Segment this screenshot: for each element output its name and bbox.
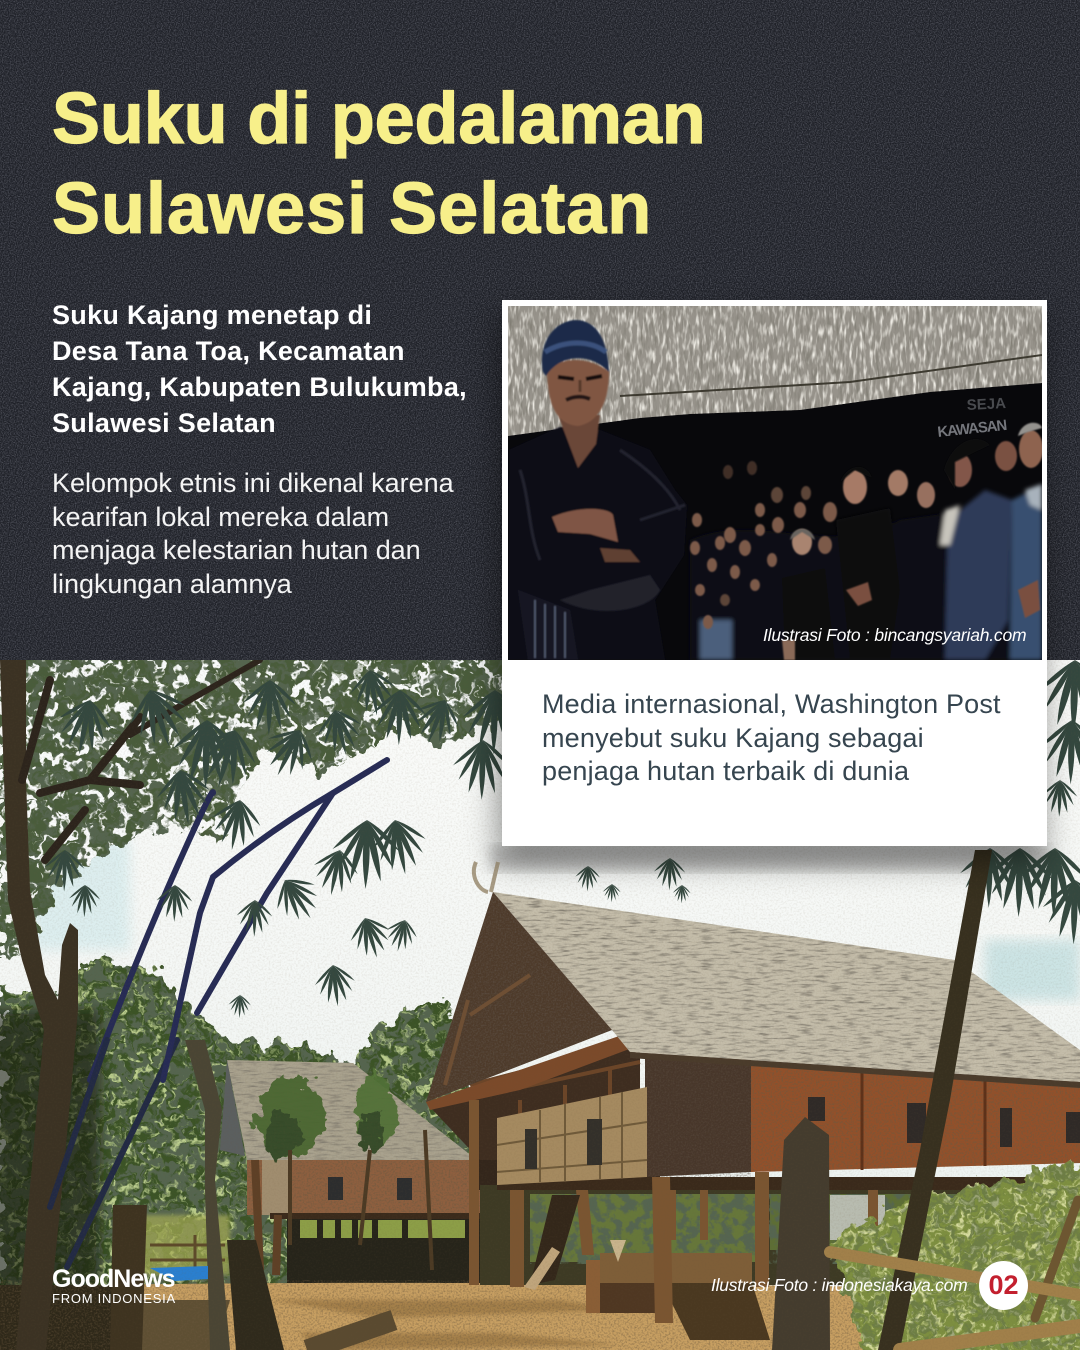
big house balcony wall (497, 1087, 647, 1185)
page number badge: 02 (988, 1270, 1019, 1300)
logo: GoodNews from Indonesia: GoodNews (52, 1265, 175, 1293)
title (52, 79, 706, 249)
bamboo canopy (0, 660, 502, 960)
body text: menjaga kelestarian hutan dan (52, 535, 421, 565)
big roof (493, 892, 1080, 1082)
branches (22, 660, 260, 860)
lead text: Suku Kajang menetap di (52, 300, 372, 330)
crowd clothes (690, 484, 1042, 660)
porch underside (430, 1040, 640, 1160)
small house (220, 1058, 482, 1283)
logo: GoodNews from Indonesia (52, 1265, 176, 1306)
title: Suku di pedalaman (52, 79, 706, 159)
sign: SEJA (966, 395, 1007, 414)
background forest (0, 950, 480, 1310)
big house walls (645, 1053, 751, 1177)
trees in front of small house (256, 1072, 395, 1158)
logo: GoodNews from Indonesia: FROM INDONESIA (52, 1291, 176, 1306)
caption text: Media internasional, Washington Post (542, 689, 1001, 719)
body text: lingkungan alamnya (52, 569, 292, 599)
shadow cast by the card (490, 845, 1050, 871)
title: Sulawesi Selatan (52, 169, 652, 249)
sign (937, 395, 1008, 441)
far foliage top right (575, 658, 1080, 944)
lead text: Sulawesi Selatan (52, 408, 276, 438)
body text (52, 468, 454, 599)
ground (0, 1283, 1080, 1350)
man (508, 320, 687, 660)
body text: Kelompok etnis ini dikenal karena (52, 468, 454, 498)
lead text (52, 300, 467, 438)
lead text: Desa Tana Toa, Kecamatan (52, 336, 405, 366)
caption text (542, 689, 1001, 786)
posts (469, 1100, 878, 1323)
sign: KAWASAN (937, 417, 1008, 441)
caption text: menyebut suku Kajang sebagai (542, 722, 924, 752)
body text: kearifan lokal mereka dalam (52, 502, 389, 532)
foreground trunks (0, 660, 992, 1350)
panel: white photo card (502, 300, 1047, 846)
photo: Kajang man and crowd (508, 306, 1042, 660)
page number badge (979, 1261, 1028, 1310)
crowd faces (690, 430, 1043, 660)
blue tarp (150, 1266, 208, 1281)
bright brush on the right (820, 1150, 1080, 1350)
big house under-floor space (470, 1100, 660, 1190)
caption text: penjaga hutan terbaik di dunia (542, 756, 909, 786)
lead text: Kajang, Kabupaten Bulukumba, (52, 372, 467, 402)
bamboo culms (50, 760, 387, 1267)
photo credit: Ilustrasi Foto : indonesiakaya.com (711, 1275, 967, 1295)
bamboo leaves (44, 665, 527, 1018)
photo: traditional Kajang houses in the forest (0, 660, 1080, 1350)
photo credit: Ilustrasi Foto : bincangsyariah.com (763, 625, 1026, 645)
crowd hair (790, 423, 1042, 540)
